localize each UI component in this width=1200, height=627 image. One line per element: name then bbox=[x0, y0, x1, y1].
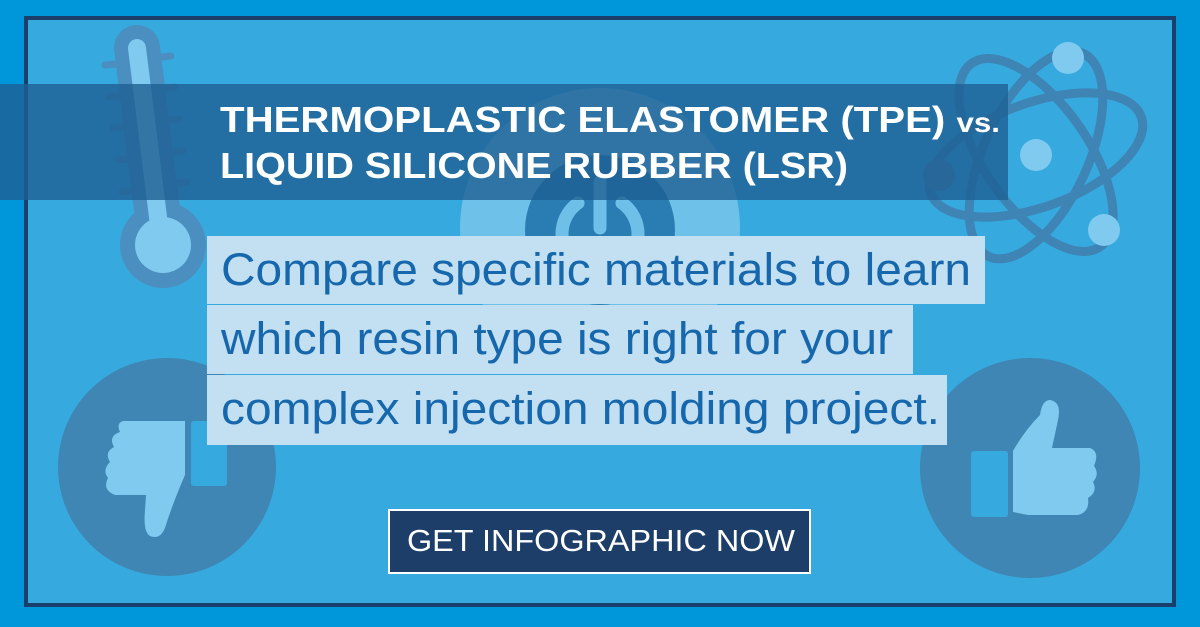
button: get infographic bbox=[389, 510, 810, 573]
title: THERMOPLASTIC ELASTOMER (TPE) vs. bbox=[220, 99, 1000, 140]
icon: atom bbox=[913, 32, 1159, 278]
icon: power button bbox=[460, 88, 740, 368]
text block: description bbox=[207, 236, 985, 445]
text block: description: complex injection molding project. bbox=[221, 383, 940, 434]
text block: description: which resin type is right for your bbox=[220, 313, 893, 364]
icon: thumbs up bbox=[920, 358, 1140, 578]
icon: thermometer bbox=[105, 48, 206, 288]
title band bbox=[0, 84, 1008, 200]
icon: thumbs down bbox=[58, 358, 276, 576]
button: get infographic: GET INFOGRAPHIC NOW bbox=[407, 523, 796, 558]
text block: description: Compare specific materials to learn bbox=[221, 244, 971, 295]
title band: LIQUID SILICONE RUBBER (LSR) bbox=[220, 145, 848, 186]
